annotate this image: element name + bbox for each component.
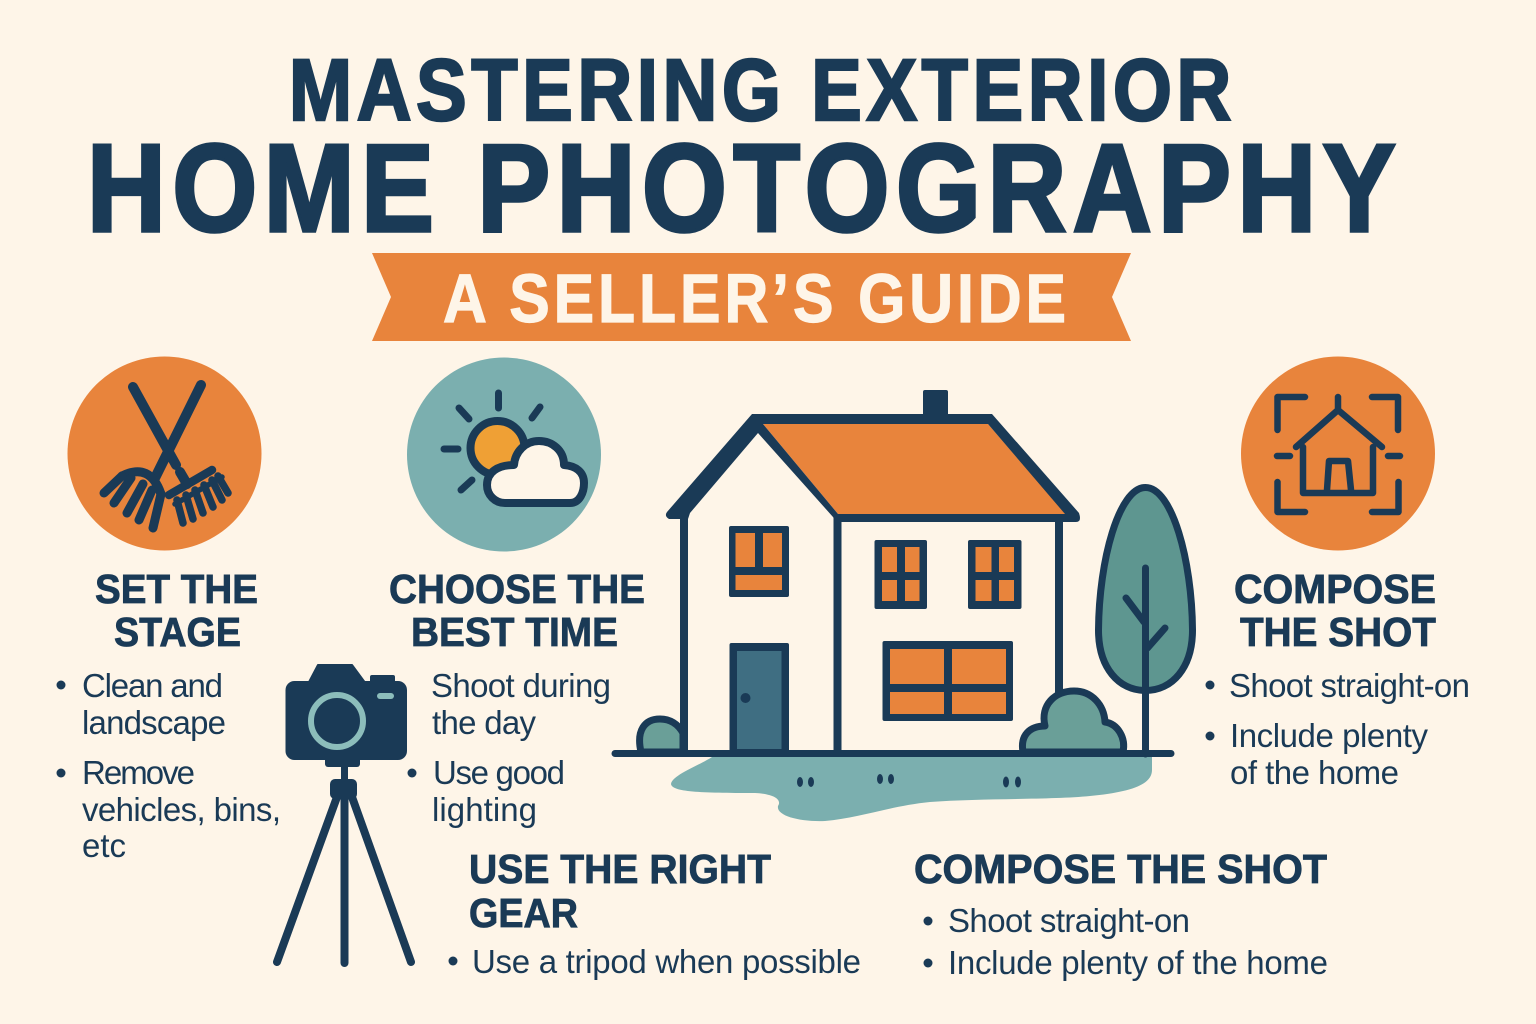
text: compose the shot bullets (bottom): Shoot straight-on <box>948 902 1190 939</box>
text: set the stage bullets <box>56 667 281 864</box>
roof outline <box>666 414 1080 522</box>
window: gable <box>729 526 789 597</box>
text: choose the best time bullets: Use good <box>433 754 565 791</box>
wall lines <box>684 516 1059 754</box>
heading: compose the shot (bottom): COMPOSE THE SHOT <box>914 846 1327 892</box>
text: compose the shot bullets (bottom): Include plenty of the home <box>948 944 1328 981</box>
heading: compose the shot (right) <box>1234 566 1436 655</box>
window: large <box>882 641 1013 721</box>
walls <box>686 433 1060 752</box>
heading: choose the best time: BEST TIME <box>411 609 618 655</box>
title <box>87 42 1396 258</box>
text: use the right gear bullet: Use a tripod when possible <box>472 943 861 980</box>
text: choose the best time bullets <box>408 667 611 828</box>
text: compose the shot bullets (right): Include plenty <box>1230 717 1428 754</box>
banner: a seller's guide: A SELLER’S GUIDE <box>443 259 1066 337</box>
text: compose the shot bullets (right): Shoot straight-on <box>1229 667 1470 704</box>
heading: compose the shot (right): THE SHOT <box>1240 609 1436 655</box>
text: choose the best time bullets: the day <box>432 704 536 741</box>
heading: use the right gear: GEAR <box>469 890 578 936</box>
icon: house in camera frame on orange circle <box>1241 356 1435 550</box>
door <box>730 643 789 753</box>
illustration: house <box>612 390 1192 821</box>
text: choose the best time bullets: lighting <box>432 791 537 828</box>
heading: set the stage: SET THE <box>95 566 258 612</box>
ground line <box>612 750 1174 757</box>
lawn <box>671 757 1152 821</box>
text: compose the shot bullets (right) <box>1206 667 1470 791</box>
chimney <box>923 390 948 420</box>
heading: set the stage <box>95 566 258 655</box>
heading: set the stage: STAGE <box>114 609 241 655</box>
text: set the stage bullets: vehicles, bins, <box>82 791 281 828</box>
title: MASTERING EXTERIOR <box>289 42 1231 139</box>
tree <box>1098 488 1192 754</box>
icon: camera on tripod <box>277 665 411 963</box>
window: upper left <box>874 540 927 609</box>
heading: choose the best time: CHOOSE THE <box>389 566 645 612</box>
icon: rakes in orange circle <box>68 356 262 550</box>
heading: use the right gear <box>469 846 771 936</box>
bush: right <box>1022 691 1124 752</box>
heading: compose the shot (right): COMPOSE <box>1234 566 1436 612</box>
heading: choose the best time <box>389 566 645 655</box>
title: HOME PHOTOGRAPHY <box>87 118 1396 258</box>
window: upper right <box>968 540 1022 609</box>
text: choose the best time bullets: Shoot during <box>431 667 611 704</box>
text: set the stage bullets: Clean and <box>82 667 223 704</box>
heading: use the right gear: USE THE RIGHT <box>469 846 771 892</box>
bush: left <box>640 719 683 752</box>
text: set the stage bullets: etc <box>82 827 126 864</box>
roof <box>763 424 1066 514</box>
text: set the stage bullets: Remove <box>82 754 195 791</box>
text: set the stage bullets: landscape <box>82 704 226 741</box>
text: compose the shot bullets (bottom) <box>924 902 1328 981</box>
grass tufts <box>797 774 1021 788</box>
icon: sun and cloud in teal circle <box>407 358 601 552</box>
text: compose the shot bullets (right): of the home <box>1230 754 1399 791</box>
